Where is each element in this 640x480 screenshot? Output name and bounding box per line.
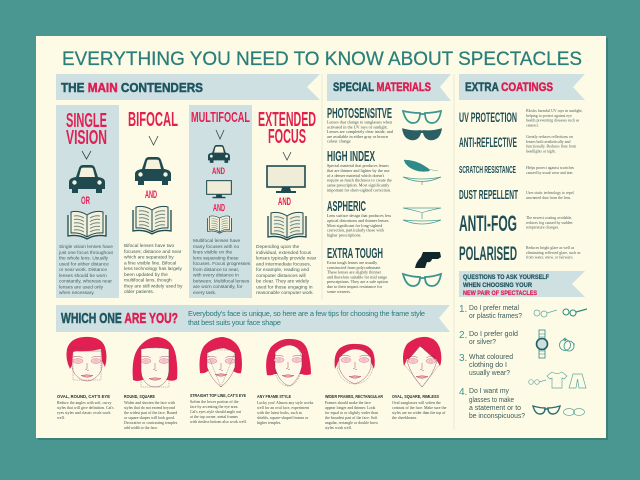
material: photosensitive: Lenses are completely clear inside, and	[327, 129, 394, 135]
column: multifocal	[189, 105, 252, 298]
question 4: Do I want my	[469, 388, 509, 395]
column: multifocal: AND	[213, 202, 225, 214]
column: single vision: VISION	[66, 127, 107, 149]
question 1: or plastic frames?	[469, 313, 522, 320]
material: aspheric: correction, particularly those with	[327, 228, 385, 234]
material: aspheric: optical distortions and thinner lenses.	[327, 218, 389, 223]
material: photosensitive: PHOTOSENSITVE	[327, 105, 392, 122]
column: multifocal: every task.	[193, 290, 216, 296]
material: aspheric: ASPHERIC	[327, 198, 366, 215]
face 6: diamond: styles are no wider than the top of	[392, 410, 446, 415]
banner: special materials: SPECIAL MATERIALS	[333, 80, 431, 94]
question 2	[459, 330, 575, 358]
panel: extra coatings	[459, 74, 585, 265]
face 6: diamond	[392, 337, 447, 420]
column: multifocal: lines visible on the	[193, 250, 233, 256]
coating: uv protection: health preventing diseases such as	[526, 119, 580, 123]
column: bifocal: BIFOCAL	[128, 109, 178, 131]
icon: metal glasses	[534, 310, 557, 317]
material: photosensitive	[327, 105, 442, 144]
coating: uv protection: cataract.	[526, 123, 539, 127]
face 5: round wider frames	[325, 344, 384, 430]
question 3	[459, 353, 586, 388]
column: single vision: OR	[81, 195, 90, 207]
panel: which one are you	[56, 305, 450, 430]
face 1: oval: Reduce the angles with soft, curvy	[57, 400, 111, 406]
question 4: be inconspicuous?	[469, 413, 525, 420]
coating: dust repellent: unwanted dust from the lens.	[526, 196, 571, 200]
column: extended focus: computer distances will	[256, 273, 306, 279]
face 2: round: or square shapes will look good.	[124, 415, 175, 420]
column: single vision	[56, 105, 119, 298]
column: bifocal: older patients.	[124, 289, 154, 295]
banner: special materials	[327, 74, 451, 101]
column: single vision: SINGLE	[66, 110, 107, 132]
face 3: heart: Soften the lower portion of the	[190, 399, 239, 404]
column: extended focus: EXTENDED	[258, 109, 316, 131]
banner: extra coatings	[459, 74, 585, 100]
column: single vision: lenses are used only	[59, 284, 104, 290]
face 2: round: Widen and shorten the face with	[124, 400, 175, 405]
material: high index: require as much thickness to create the	[327, 178, 392, 183]
face 2: round: add width to the face.	[124, 425, 158, 430]
face 3: heart	[190, 337, 247, 424]
face 2: round: styles that do not extend beyond	[124, 405, 175, 410]
question 1: 1.	[459, 304, 467, 315]
material: aspheric: Lens surface design that produces less	[327, 213, 391, 218]
icon: glasses	[529, 380, 546, 384]
face 3: heart: face by accenting the eye area.	[190, 404, 238, 409]
icon: statement glasses	[533, 406, 560, 414]
face 2: round: ROUND, SQUARE	[124, 394, 155, 399]
question 4	[459, 387, 584, 420]
question 4: glasses to make	[469, 397, 514, 404]
material: aspheric	[327, 198, 441, 238]
column: single vision: the whole lens. Usually	[59, 256, 109, 262]
question 3: clothing do I	[469, 362, 507, 369]
column: multifocal: focuses. Focus progresses	[193, 261, 251, 267]
icon: watch	[536, 330, 548, 358]
face 4: oval any frame: shields, square-shaped frames or	[257, 415, 309, 421]
banner: which one are you: Everybody's face is unique, so here are a few tips for choosing the frame style	[188, 309, 425, 318]
column: bifocal: a fine visible line. Bifocal	[124, 260, 176, 266]
material: extra tough: EXTRA TOUGH	[327, 245, 383, 262]
icon: plastic glasses	[563, 309, 587, 316]
column: bifocal: focuses; distance and near	[124, 249, 182, 255]
column: bifocal: AND	[145, 189, 157, 201]
material: high index: of a denser material which doesn't	[327, 173, 385, 178]
material: extra tough: and therefore suitable for mid range	[327, 274, 387, 279]
banner: questions: WHEN CHOOSING YOUR	[463, 282, 532, 289]
banner: extra coatings: EXTRA COATINGS	[465, 80, 553, 94]
column: extended focus: AND	[278, 196, 291, 208]
question 2: or silver?	[469, 339, 496, 346]
column: multifocal: many focuses with no	[193, 244, 239, 250]
banner: main contenders	[56, 74, 320, 100]
face 1: oval: eyes styles and classic ovals work	[57, 410, 111, 415]
face 6: diamond: Oval sunglasses will soften the	[392, 400, 441, 405]
icon: teal cat-eye glasses	[403, 274, 441, 286]
banner: which one are you: WHICH ONE ARE YOU?	[61, 310, 178, 327]
coating: dust repellent: DUST REPELLENT	[459, 188, 518, 202]
panel: special materials	[327, 74, 451, 294]
column: extended focus: FOCUS	[268, 126, 306, 148]
face 1: oval	[57, 337, 114, 420]
column: multifocal: from distance to near,	[193, 267, 239, 273]
column: extended focus: Depending upon the	[256, 244, 300, 250]
coating: anti-fog: ANTI-FOG	[459, 211, 517, 236]
panel: main contenders	[56, 74, 320, 298]
face 4: oval any frame: with the latest looks, such as	[257, 410, 303, 416]
column: extended focus: used for those engaging in	[256, 284, 313, 290]
column: multifocal: Multifocal lenses have	[193, 238, 241, 244]
column: extended focus: and intermediate focuses,	[256, 261, 311, 267]
banner: which one are you	[56, 305, 450, 332]
banner: questions	[459, 271, 585, 297]
face 3: heart: at the top corner, metal frames	[190, 414, 238, 420]
face 1: oval: well.	[57, 415, 65, 420]
panel: questions	[459, 271, 587, 420]
question 1: Do I prefer metal	[469, 305, 519, 312]
coating: uv protection: helping to protect against eye	[526, 114, 572, 118]
icon: shorts	[569, 374, 586, 388]
column: multifocal: MULTIFOCAL	[191, 109, 250, 126]
face 6: diamond: OVAL, SQUARE, RIMLESS	[392, 394, 439, 399]
face 4: oval any frame: higher temples.	[257, 420, 281, 425]
material: aspheric: higher prescriptions.	[327, 233, 361, 238]
question 4: 4.	[459, 387, 467, 398]
coating: dust repellent: Uses static technology to repel	[526, 191, 574, 195]
coating: polarised: Reduces bright glare as well as	[526, 246, 575, 250]
column: single vision: lenses should be worn	[59, 273, 107, 279]
coating: polarised: POLARISED	[459, 244, 517, 265]
column: single vision: just one focus throughout	[58, 250, 114, 256]
material: photosensitive: are available in either gray or brown	[327, 134, 389, 139]
material: aspheric: Most significant for long-sighted	[327, 223, 383, 228]
icon: t-shirt	[547, 372, 567, 388]
icon: rings	[560, 338, 575, 351]
face 3: heart: with rimless bottom also work well.	[190, 419, 247, 424]
column: single vision: constantly, whereas near	[59, 278, 112, 284]
icon: feather	[404, 160, 438, 172]
face 5: round wider frames: angular, rectangle or double brow	[325, 420, 378, 426]
face 4: oval any frame	[257, 339, 314, 425]
face 5: round wider frames: styles work well.	[325, 425, 352, 430]
icon: thin lens	[403, 177, 441, 185]
column: extended focus: for example, reading and	[256, 267, 309, 273]
face 4: oval any frame: Lucky you! Almost any style works	[257, 400, 314, 405]
face 6: diamond: contrast of the face. Make sure the	[392, 405, 447, 410]
face 3: heart: Cat's eyes style should angle out	[190, 409, 242, 414]
column: multifocal: are worn constantly, for	[193, 284, 243, 290]
column: multifocal: with every distance in	[193, 272, 239, 278]
face 2: round	[124, 337, 178, 430]
material: extra tough	[327, 245, 441, 294]
column: extended focus: individual, extended focus	[256, 250, 312, 256]
banner: questions: QUESTIONS TO ASK YOURSELF	[463, 274, 549, 281]
face 3: heart: STRAIGHT TOP LINE, CAT'S EYE	[190, 393, 246, 398]
coating: anti-reflective: ANTI-REFLECTIVE	[459, 134, 517, 150]
icon: rimless glasses	[564, 408, 584, 416]
material: extra tough: Extra tough lenses are usually	[327, 260, 378, 265]
question 3: 3.	[459, 353, 467, 364]
column: bifocal: multifocal lens, though	[124, 278, 172, 284]
material: photosensitive: colour change	[327, 139, 351, 144]
banner: main contenders: THE MAIN CONTENDERS	[61, 80, 203, 95]
column: single vision: when necessary.	[59, 290, 95, 296]
coating: scratch resistance: Helps protect against scratches	[526, 166, 575, 170]
material: photosensitive: Lenses that change to sunglasses when	[327, 120, 393, 124]
column: bifocal: lens technology has largely	[124, 266, 182, 272]
coating: polarised: eliminating reflected glare, such as	[526, 251, 581, 256]
icon: clear cat-eye glasses	[403, 111, 441, 123]
column: multifocal: AND	[212, 166, 225, 176]
material: high index: important for short-sighted correction.	[327, 188, 391, 192]
material: high index: that are thinner and lighter by the use	[327, 168, 390, 173]
question 1	[459, 304, 587, 320]
material: high index: HIGH INDEX	[327, 148, 375, 165]
coating: anti-fog: reduces fog caused by sudden	[526, 221, 573, 225]
coating: uv protection: Blocks harmful UV rays in sunlight,	[526, 109, 583, 114]
coating: scratch resistance: SCRATCH RESISTANCE	[459, 165, 516, 176]
column: multifocal: between. Multifocal lenses	[193, 278, 250, 284]
face 1: oval: OVAL, ROUND, CAT'S EYE	[57, 394, 110, 399]
material: extra tough: These lenses are slightly thinner	[327, 270, 382, 275]
question 3: What coloured	[469, 354, 513, 361]
face 2: round: the widest part of the face. Round	[124, 410, 177, 415]
material: high index: same prescription. Most significantly	[327, 183, 390, 188]
material: high index	[327, 148, 441, 192]
face 5: round wider frames: Frames should make the face	[325, 400, 371, 405]
face 4: oval any frame: ANY FRAME STYLE	[257, 394, 291, 399]
column: bifocal: they are still widely used by	[124, 283, 183, 289]
coating: anti-reflective: lenses both aesthetically and	[526, 140, 570, 144]
icon: aspheric lens	[403, 208, 441, 224]
column: extended focus: be clear. They are widely	[256, 278, 310, 284]
paper panel	[36, 36, 608, 440]
coating: anti-fog: temperature changes.	[526, 226, 559, 230]
column: single vision: or near work. Distance	[59, 267, 107, 273]
question 4: a statement or to	[469, 405, 521, 412]
face 6: diamond: the cheekbones.	[392, 415, 417, 420]
face 5: round wider frames: WIDER FRAMES, RECTANGULAR	[325, 394, 384, 399]
coating: uv protection: UV PROTECTION	[459, 109, 517, 125]
column: bifocal: which are separated by	[124, 254, 174, 260]
column: single vision: used for either distance	[59, 261, 109, 267]
material: extra tough: due to their impact resistance for	[327, 284, 383, 289]
column: multifocal: lens separating these	[193, 255, 239, 261]
icon: tinted cat-eye sunglasses	[402, 128, 442, 140]
column: extended focus: reasonable computer work.	[256, 290, 314, 296]
question 3: usually wear?	[469, 370, 510, 377]
column: bifocal: been updated by the	[124, 272, 168, 278]
face 4: oval any frame: well for an oval face, experiment	[257, 405, 310, 411]
banner: questions: NEW PAIR OF SPECTACLES	[463, 290, 538, 297]
icon: revolver	[415, 252, 441, 268]
material: photosensitive: activated in the UV rays of sunlight.	[327, 124, 388, 129]
coating: anti-fog: The newest coating available,	[526, 216, 572, 221]
column: bifocal: Bifocal lenses have two	[124, 243, 174, 249]
question 2: 2.	[459, 330, 467, 341]
face 5: round wider frames: for equal to or slightly wider than	[325, 410, 378, 415]
material: extra tough: some wearers.	[327, 289, 351, 294]
coating: anti-reflective: Greatly reduces reflections on	[526, 135, 573, 139]
question 2: Do I prefer gold	[469, 331, 518, 338]
column: extended focus: lenses typically provide near	[256, 256, 317, 262]
material: high index: Special material that produces lenses	[327, 163, 389, 168]
face 5: round wider frames: appear longer and thinner. Look	[325, 405, 375, 410]
banner: which one are you: that best suits your face shape	[188, 318, 281, 327]
coating: polarised: from water, snow, or fairways.	[526, 256, 573, 261]
face 2: round: Decorative or contrasting temples	[124, 420, 178, 425]
face 1: oval: styles that will give definition. Cat's	[57, 405, 114, 410]
column: bifocal	[124, 109, 183, 295]
coating: anti-reflective: headlights at night.	[526, 149, 556, 153]
coating: scratch resistance: caused by usual wear and tear.	[526, 171, 573, 175]
coating: anti-reflective: functionally. Reduces flare from	[526, 145, 576, 149]
face 5: round wider frames: the broadest part of the face. Soft	[325, 415, 378, 420]
material: extra tough: constructed from polycarbonate.	[327, 265, 381, 270]
column: single vision: Single vision lenses have	[59, 244, 113, 250]
title: EVERYTHING YOU NEED TO KNOW ABOUT SPECTACLES	[62, 48, 582, 70]
column: extended focus	[256, 109, 317, 296]
material: extra tough: prescriptions. They are a safe option	[327, 279, 389, 284]
